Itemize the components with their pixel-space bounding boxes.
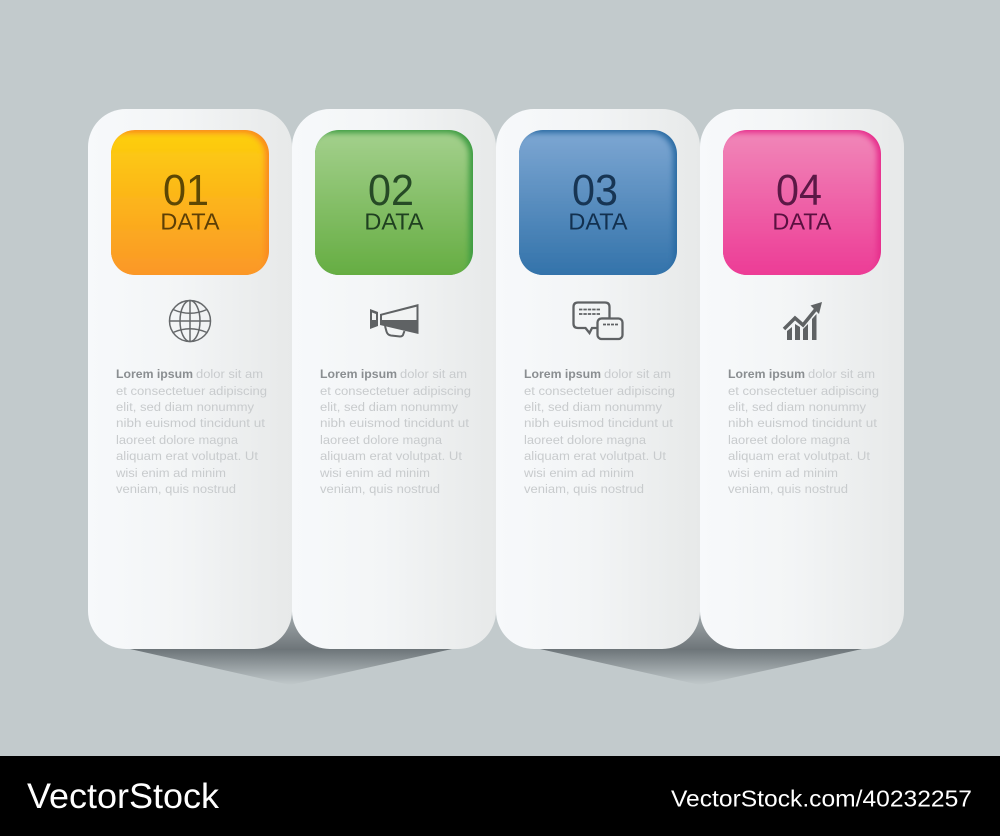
body text 02: veniam, quis nostrud (320, 482, 440, 496)
body text 03: nibh euismod tincidunt ut (524, 416, 674, 430)
body text 02: Lorem ipsum (320, 367, 397, 381)
badge 02 (308, 130, 473, 283)
body text 03: dolor sit am (604, 367, 671, 381)
body text 04 (727, 367, 879, 496)
body text 01: dolor sit am (196, 367, 263, 381)
body text 01: wisi enim ad minim (115, 466, 226, 480)
body text 03 (523, 367, 675, 496)
body text 02: aliquam erat volutpat. Ut (320, 449, 463, 463)
badge 03 (512, 130, 677, 283)
body text 01: nibh euismod tincidunt ut (116, 416, 266, 430)
body text 03: et consectetuer adipiscing (524, 384, 675, 398)
body text 02 (319, 367, 471, 496)
body text 02: laoreet dolore magna (320, 433, 442, 447)
badge label 03: DATA (568, 208, 628, 234)
body text 04: wisi enim ad minim (727, 466, 838, 480)
body text 02: elit, sed diam nonummy (320, 400, 459, 414)
footer bar (0, 756, 1000, 836)
panel card 03 (496, 109, 700, 649)
badge number 02: 02 (368, 166, 414, 215)
body text 02: nibh euismod tincidunt ut (320, 416, 470, 430)
body text 03: elit, sed diam nonummy (524, 400, 663, 414)
badge number 01: 01 (163, 166, 209, 215)
body text 01 (115, 367, 267, 496)
badge label 02: DATA (364, 208, 424, 234)
badge 04 (716, 130, 881, 283)
body text 01: Lorem ipsum (116, 367, 193, 381)
body text 01: elit, sed diam nonummy (116, 400, 255, 414)
body text 01: et consectetuer adipiscing (116, 384, 267, 398)
body text 03: wisi enim ad minim (523, 466, 634, 480)
body text 01: veniam, quis nostrud (116, 482, 236, 496)
body text 01: laoreet dolore magna (116, 433, 238, 447)
body text 04: veniam, quis nostrud (728, 482, 848, 496)
icon: globe (170, 300, 210, 342)
shadow: under panels 1 and 2 (130, 612, 452, 685)
badge number 03: 03 (572, 166, 618, 215)
body text 03: aliquam erat volutpat. Ut (524, 449, 667, 463)
panel: step 04 (700, 109, 904, 649)
panel card 01 (88, 109, 292, 649)
panel: step 03 (496, 109, 700, 649)
shadow: under panels 3 and 4 (540, 612, 862, 685)
body text 04: dolor sit am (808, 367, 875, 381)
body text 04: et consectetuer adipiscing (728, 384, 879, 398)
body text 01: aliquam erat volutpat. Ut (116, 449, 259, 463)
body text 02: wisi enim ad minim (319, 466, 430, 480)
body text 04: Lorem ipsum (728, 367, 805, 381)
panel card 02 (292, 109, 496, 649)
body text 03: Lorem ipsum (524, 367, 601, 381)
body text 02: dolor sit am (400, 367, 467, 381)
icon: growth chart (784, 302, 822, 340)
body text 04: elit, sed diam nonummy (728, 400, 867, 414)
body text 03: laoreet dolore magna (524, 433, 646, 447)
body text 04: nibh euismod tincidunt ut (728, 416, 878, 430)
body text 04: laoreet dolore magna (728, 433, 850, 447)
badge label 04: DATA (772, 208, 832, 234)
body text 03: veniam, quis nostrud (524, 482, 644, 496)
badge label 01: DATA (160, 208, 220, 234)
panel: step 01 (88, 109, 292, 649)
footer url: VectorStock.com/40232257 (671, 786, 972, 812)
panel card 04 (700, 109, 904, 649)
panel: step 02 (292, 109, 496, 649)
footer logo: VectorStock (27, 777, 220, 816)
icon: megaphone (370, 304, 418, 336)
badge 01 (104, 130, 269, 283)
icon: chat bubbles (574, 302, 622, 339)
badge number 04: 04 (776, 166, 822, 215)
body text 02: et consectetuer adipiscing (320, 384, 471, 398)
body text 04: aliquam erat volutpat. Ut (728, 449, 871, 463)
